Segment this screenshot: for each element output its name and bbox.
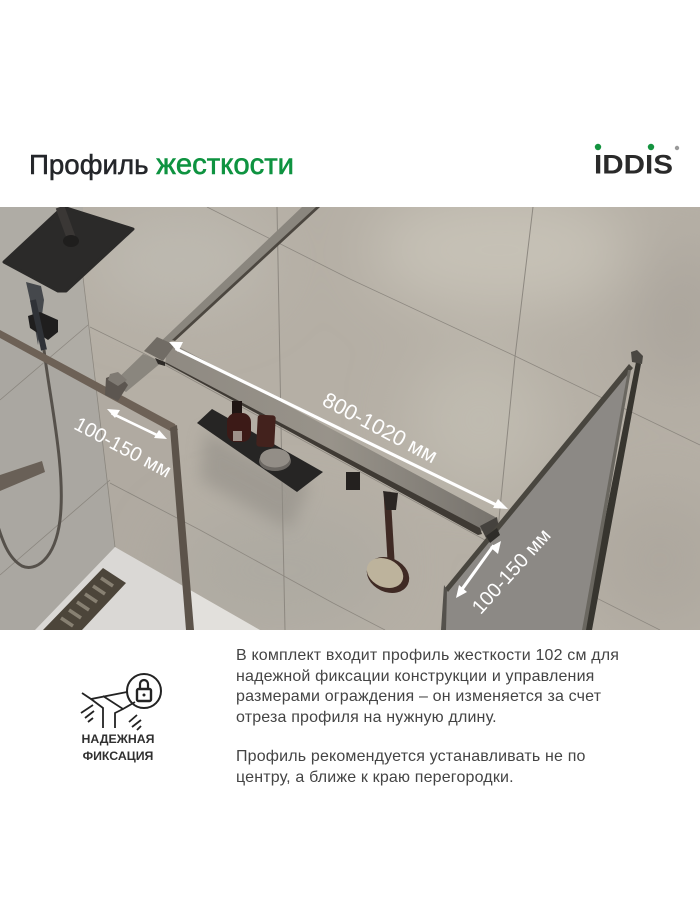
hose xyxy=(0,350,61,567)
shelf xyxy=(197,401,323,492)
tile joints xyxy=(0,207,700,630)
photo: shower enclosure xyxy=(0,190,700,630)
description: second paragraph: Профиль рекомендуется устанавливать не по xyxy=(236,748,586,765)
arrow: crossbar width xyxy=(169,342,508,509)
wall xyxy=(0,207,700,630)
arrow: left offset xyxy=(107,409,167,439)
description: first paragraph xyxy=(236,647,619,726)
description: second paragraph xyxy=(236,748,586,786)
wall hook xyxy=(346,472,360,490)
logo: IDDIS: IDDIS xyxy=(594,150,673,180)
description: first paragraph: В комплект входит профиль жесткости 102 см для xyxy=(236,647,619,664)
icon caption xyxy=(82,732,154,763)
description: first paragraph: отреза профиля на нужную длину. xyxy=(236,708,497,726)
label: 800-1020 мм: 800-1020 мм xyxy=(319,388,441,468)
floor xyxy=(35,547,260,630)
valve handle xyxy=(0,461,45,491)
icon caption: ФИКСАЦИЯ xyxy=(83,749,153,763)
drain xyxy=(43,568,126,630)
icon caption: НАДЕЖНАЯ xyxy=(82,732,154,746)
label: left 100-150 мм: 100-150 мм xyxy=(70,413,175,483)
description: first paragraph: размерами ограждения – он изменяется за счет xyxy=(236,688,601,705)
arrow: right offset xyxy=(456,541,501,598)
dish xyxy=(259,448,291,471)
left glass panel xyxy=(0,330,194,630)
second bottle xyxy=(256,415,276,447)
stiffening profile, diagonal xyxy=(105,207,320,401)
icon: secure fixing with padlock xyxy=(81,674,161,730)
bottle xyxy=(227,401,251,442)
stiffening profile, crossbar xyxy=(144,337,499,538)
shelf shadow xyxy=(200,430,310,530)
label: right 100-150 мм: 100-150 мм xyxy=(468,525,556,619)
right glass panel xyxy=(441,350,643,630)
bath brush xyxy=(366,491,410,593)
left wall xyxy=(0,207,115,630)
description: first paragraph: надежной фиксации конструкции и управления xyxy=(236,668,595,684)
description: second paragraph: центру, а ближе к краю перегородки. xyxy=(236,768,514,786)
shower head xyxy=(4,207,133,291)
title: Профиль жесткости xyxy=(29,148,294,181)
hand shower and holder xyxy=(26,282,58,350)
